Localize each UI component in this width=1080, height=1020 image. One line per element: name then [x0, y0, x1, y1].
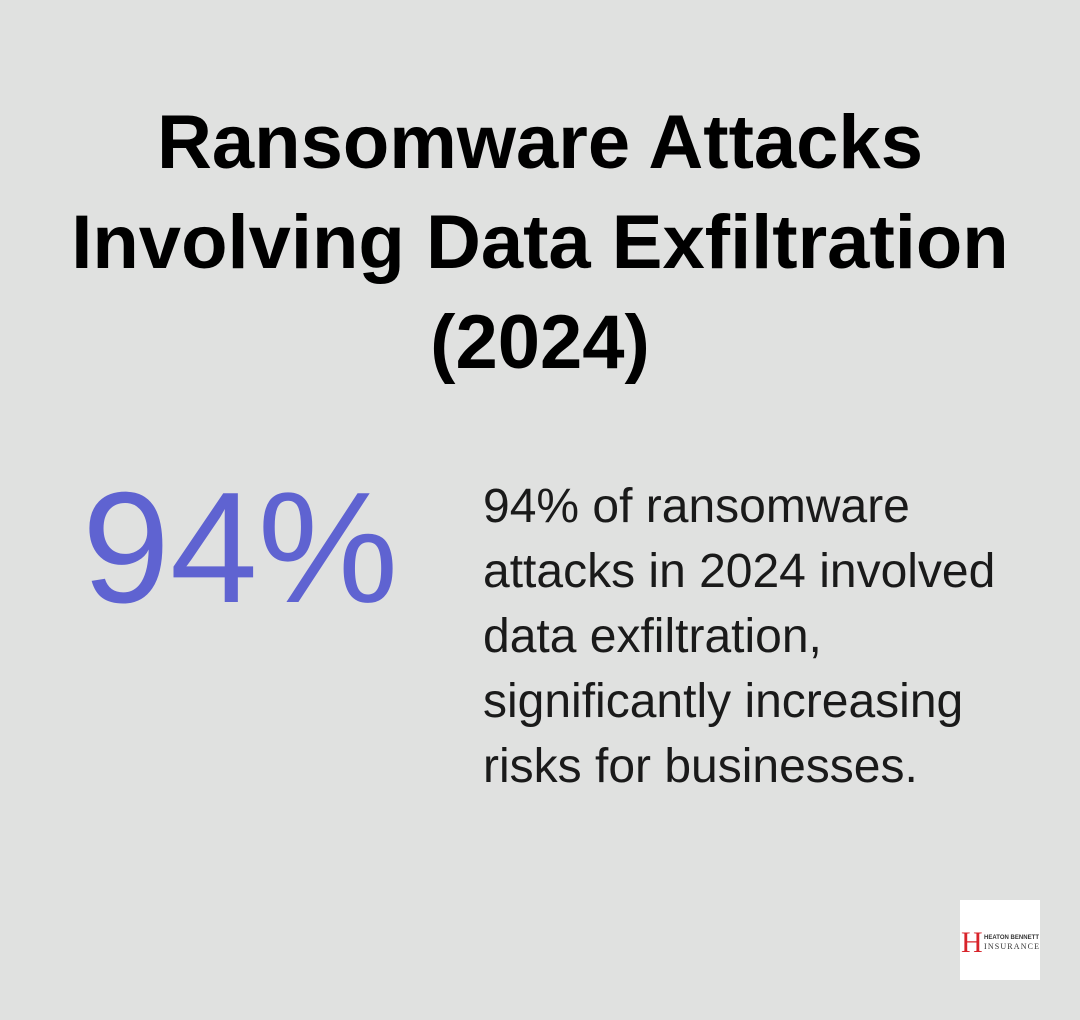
description [483, 480, 995, 793]
description: attacks in 2024 involved [483, 545, 995, 598]
title: Ransomware Attacks [157, 100, 923, 185]
description: 94% of ransomware [483, 480, 910, 533]
title: Involving Data Exfiltration [71, 200, 1009, 285]
title [71, 100, 1009, 385]
logo: INSURANCE [984, 942, 1039, 951]
logo [960, 900, 1040, 980]
logo: H [961, 926, 983, 959]
description: significantly increasing [483, 675, 963, 728]
title: (2024) [430, 300, 650, 385]
big stat: 94% [82, 460, 398, 636]
logo: HEATON BENNETT [984, 935, 1039, 941]
description: data exfiltration, [483, 610, 822, 663]
description: risks for businesses. [483, 740, 918, 793]
